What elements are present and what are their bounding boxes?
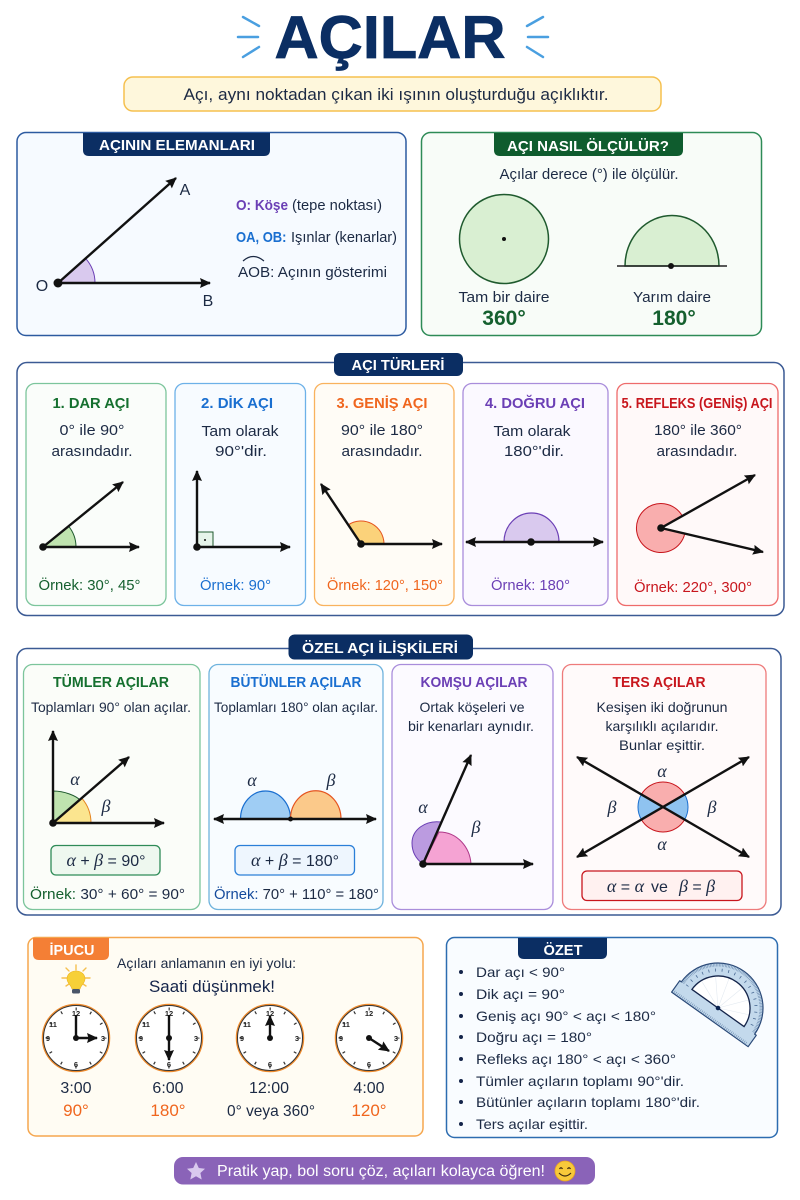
adjacent angles diagram: β xyxy=(471,817,481,837)
card: refleks açı: arasındadır. xyxy=(656,443,738,460)
clock: 3:00 xyxy=(42,1004,110,1120)
footer banner xyxy=(174,1157,595,1184)
definition banner: Açı, aynı noktadan çıkan iki ışının oluşturduğu açıklıktır. xyxy=(184,85,608,104)
clock: 3:00: 11 xyxy=(49,1020,57,1029)
card: doğru açı xyxy=(463,384,608,606)
formula: α + β = 90° xyxy=(66,850,146,870)
heading: açı nasıl ölçülür: AÇI NASIL ÖLÇÜLÜR? xyxy=(507,138,669,155)
complementary angles diagram xyxy=(49,731,164,827)
legend: gösterim xyxy=(238,256,387,281)
vertical angles diagram: α xyxy=(657,834,667,854)
angle diagram AOB: O xyxy=(36,278,48,295)
card: geniş açı: Örnek: 120°, 150° xyxy=(327,576,443,594)
clock: 3:00: 3:00 xyxy=(60,1080,92,1097)
card: doğru açı: Tam olarak xyxy=(494,423,571,440)
icon: star xyxy=(187,1162,205,1180)
supplementary angles diagram xyxy=(214,770,376,822)
card: dik açı: Tam olarak xyxy=(202,423,279,440)
acute angle xyxy=(39,482,139,551)
legend: köşe xyxy=(236,197,382,214)
clock: 6:00: 3 xyxy=(194,1034,198,1043)
reflex angle xyxy=(636,475,763,553)
legend: ışınlar xyxy=(236,229,397,246)
clock: 12:00 xyxy=(227,1004,315,1120)
vertical angles diagram: β xyxy=(607,797,617,817)
clock: 6:00: 6 xyxy=(167,1060,171,1069)
clock: 12:00: 9 xyxy=(240,1034,244,1043)
full circle xyxy=(458,194,550,330)
clock: 12:00: 6 xyxy=(268,1060,272,1069)
summary list: Doğru açı = 180° xyxy=(476,1029,592,1045)
card: tümler açılar: Toplamları 90° olan açılar. xyxy=(31,699,191,715)
supplementary angles diagram: β xyxy=(326,770,336,790)
legend: köşe: O: Köşe xyxy=(236,197,288,214)
card: tümler açılar: Örnek: 30° + 60° = 90° xyxy=(30,885,185,903)
card: dar açı: arasındadır. xyxy=(52,443,132,460)
card: bütünler açılar xyxy=(209,664,383,910)
complementary angles diagram: β xyxy=(101,796,111,816)
panel: açının elemanları xyxy=(17,132,406,336)
definition banner xyxy=(124,77,661,111)
card: ters açılar: Kesişen iki doğrunun xyxy=(596,699,728,715)
clock: 12:00: 12 xyxy=(266,1009,274,1018)
panel: açı nasıl ölçülür xyxy=(422,132,762,336)
heading: açı türleri xyxy=(334,353,463,376)
title: AÇILAR xyxy=(274,4,506,71)
formula xyxy=(582,871,742,900)
card: doğru açı: 180°'dir. xyxy=(504,443,564,460)
clock: 6:00: 180° xyxy=(150,1101,186,1120)
clock: 12:00: 0° veya 360° xyxy=(227,1103,315,1120)
heading: özet xyxy=(518,938,607,959)
clock: 4:00: 120° xyxy=(351,1101,387,1120)
clock: 3:00: 12 xyxy=(72,1009,80,1018)
summary list xyxy=(459,964,700,1132)
card: bütünler açılar: BÜTÜNLER AÇILAR xyxy=(230,674,362,691)
card: komşu açılar xyxy=(392,664,553,910)
card: bütünler açılar: Örnek: 70° + 110° = 180° xyxy=(214,885,379,903)
clock: 4:00: 9 xyxy=(339,1034,343,1043)
tip emphasis: Saati düşünmek! xyxy=(149,977,275,996)
card: ters açılar: TERS AÇILAR xyxy=(612,674,706,691)
clock: 12:00: 3 xyxy=(295,1034,299,1043)
vertical angles diagram: β xyxy=(707,797,717,817)
icon: light bulb xyxy=(62,965,90,994)
clock: 6:00 xyxy=(136,1004,202,1120)
summary list: Bütünler açıların toplamı 180°'dir. xyxy=(476,1094,700,1110)
heading: özet: ÖZET xyxy=(544,942,582,959)
card: komşu açılar: bir kenarları aynıdır. xyxy=(408,718,534,734)
card: dik açı: 90°'dir. xyxy=(215,443,267,460)
formula: α = α ve β = β xyxy=(607,876,715,896)
clock: 12:00: 12:00 xyxy=(249,1080,289,1097)
formula: α + β = 180° xyxy=(251,850,339,870)
card: geniş açı: arasındadır. xyxy=(342,443,422,460)
adjacent angles diagram xyxy=(412,755,533,868)
icon: smiley xyxy=(555,1161,575,1181)
formula xyxy=(235,846,354,875)
clock: 6:00: 11 xyxy=(142,1020,150,1029)
heading: özel açı ilişkileri xyxy=(288,634,473,660)
clock: 3:00: 9 xyxy=(46,1034,50,1043)
card: ters açılar xyxy=(562,664,766,910)
card: dar açı: 1. DAR AÇI xyxy=(52,395,130,412)
supplementary angles diagram: α xyxy=(247,770,257,790)
text: derece: Açılar derece (°) ile ölçülür. xyxy=(500,166,678,183)
card: ters açılar: Bunlar eşittir. xyxy=(619,737,705,753)
angle diagram AOB: A xyxy=(180,182,191,199)
card: doğru açı: Örnek: 180° xyxy=(491,576,570,594)
legend: ışınlar: Işınlar (kenarlar) xyxy=(291,229,397,246)
card: dik açı: Örnek: 90° xyxy=(200,576,271,594)
card: dik açı xyxy=(175,384,306,606)
card: dar açı: Örnek: 30°, 45° xyxy=(38,576,140,594)
panel: açı türleri xyxy=(17,353,784,616)
legend: köşe: (tepe noktası) xyxy=(292,197,382,214)
summary list: Geniş açı 90° < açı < 180° xyxy=(476,1008,656,1024)
clock: 4:00: 11 xyxy=(342,1020,350,1029)
card: komşu açılar: Ortak köşeleri ve xyxy=(420,699,525,715)
complementary angles diagram: α xyxy=(70,769,80,789)
clock: 3:00: 3 xyxy=(101,1034,105,1043)
right angle xyxy=(193,471,290,551)
legend: gösterim: AOB: Açının gösterimi xyxy=(238,264,387,281)
formula xyxy=(51,846,160,875)
summary list: Ters açılar eşittir. xyxy=(476,1116,588,1132)
summary list: Dik açı = 90° xyxy=(476,986,565,1002)
legend: ışınlar: OA, OB: xyxy=(236,229,286,246)
summary list: Refleks açı 180° < açı < 360° xyxy=(476,1051,676,1067)
angle diagram AOB xyxy=(36,178,213,310)
panel: özel açı ilişkileri xyxy=(17,634,781,915)
clock: 4:00: 3 xyxy=(394,1034,398,1043)
clock: 4:00: 12 xyxy=(365,1009,373,1018)
footer banner: Pratik yap, bol soru çöz, açıları kolayca öğren! xyxy=(217,1163,545,1180)
summary list: Tümler açıların toplamı 90°'dir. xyxy=(476,1073,684,1089)
clock: 12:00: 11 xyxy=(243,1020,251,1029)
card: doğru açı: 4. DOĞRU AÇI xyxy=(485,394,585,412)
angle diagram AOB: B xyxy=(203,293,213,310)
heading: ipucu: İPUCU xyxy=(50,942,94,959)
clock: 3:00: 90° xyxy=(63,1101,89,1120)
obtuse angle xyxy=(321,484,442,548)
card: dar açı: 0° ile 90° xyxy=(60,422,124,439)
card: refleks açı: 5. REFLEKS (GENİŞ) AÇI xyxy=(622,395,772,412)
heading: açı nasıl ölçülür xyxy=(494,133,683,156)
heading: açı türleri: AÇI TÜRLERİ xyxy=(352,357,444,374)
card: tümler açılar xyxy=(24,664,200,910)
half circle xyxy=(617,215,727,330)
tip text: Açıları anlamanın en iyi yolu: xyxy=(117,955,296,971)
half circle: Yarım daire xyxy=(633,289,711,306)
summary list: Dar açı < 90° xyxy=(476,964,565,980)
icon: protractor xyxy=(672,944,782,1047)
adjacent angles diagram: α xyxy=(418,797,428,817)
card: dar açı xyxy=(26,384,166,606)
panel: özet xyxy=(446,938,782,1138)
card: dik açı: 2. DİK AÇI xyxy=(201,395,273,412)
full circle: 360° xyxy=(482,307,526,330)
heading: açının elemanları: AÇININ ELEMANLARI xyxy=(99,137,255,154)
full circle: Tam bir daire xyxy=(458,289,550,306)
vertical angles diagram xyxy=(577,757,749,857)
clock: 6:00: 9 xyxy=(139,1034,143,1043)
card: tümler açılar: TÜMLER AÇILAR xyxy=(53,674,169,691)
clock: 6:00: 6:00 xyxy=(152,1080,184,1097)
heading: özel açı ilişkileri: ÖZEL AÇI İLİŞKİLERİ xyxy=(302,640,458,657)
straight angle xyxy=(466,513,603,546)
card: ters açılar: karşılıklı açılarıdır. xyxy=(606,718,718,734)
clock: 4:00 xyxy=(336,1004,402,1120)
card: geniş açı: 3. GENİŞ AÇI xyxy=(336,395,428,412)
clock: 4:00: 4:00 xyxy=(353,1080,385,1097)
card: refleks açı: 180° ile 360° xyxy=(654,422,742,439)
clock: 4:00: 6 xyxy=(367,1060,371,1069)
heading: açının elemanları xyxy=(83,133,270,156)
card: geniş açı: 90° ile 180° xyxy=(341,422,423,439)
card: bütünler açılar: Toplamları 180° olan açılar. xyxy=(214,699,378,715)
vertical angles diagram: α xyxy=(657,761,667,781)
clock: 3:00: 6 xyxy=(74,1060,78,1069)
card: refleks açı: Örnek: 220°, 300° xyxy=(634,578,752,596)
heading: ipucu xyxy=(33,938,109,960)
card: geniş açı xyxy=(314,384,454,606)
clock: 6:00: 12 xyxy=(165,1009,173,1018)
panel: ipucu xyxy=(28,938,423,1136)
half circle: 180° xyxy=(652,307,696,330)
card: refleks açı xyxy=(617,384,778,606)
card: komşu açılar: KOMŞU AÇILAR xyxy=(420,674,528,691)
